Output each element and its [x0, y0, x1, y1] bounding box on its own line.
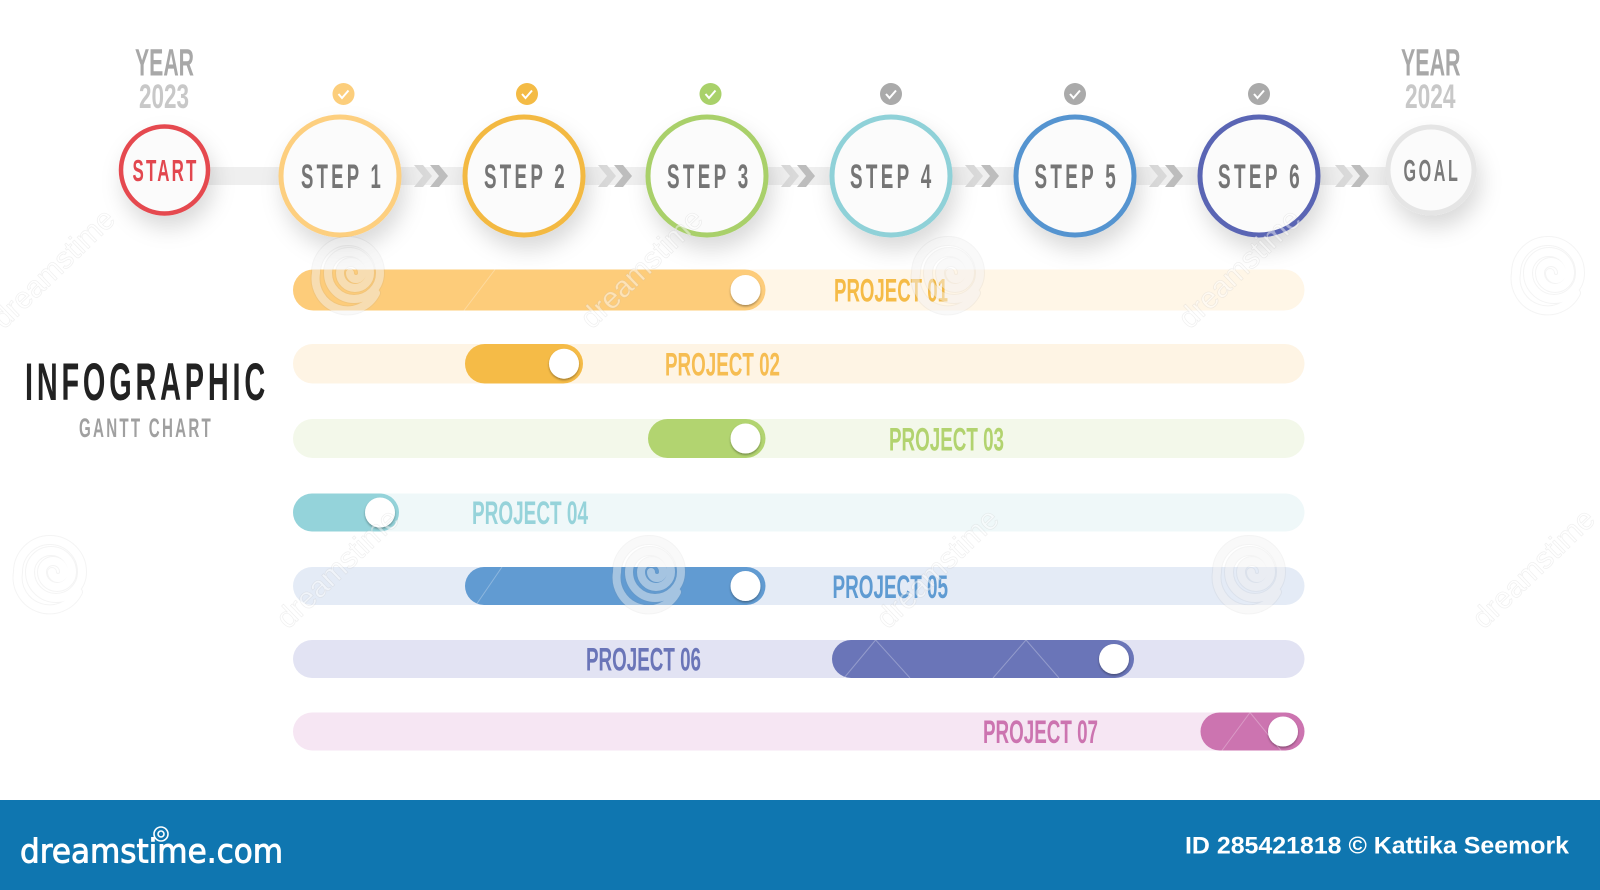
year 2024 label: YEAR [1401, 42, 1460, 84]
step 1 [281, 117, 399, 235]
project 01 row: PROJECT 01 [834, 272, 948, 308]
project 07 row: PROJECT 07 [983, 714, 1098, 750]
watermark text: dreamstime [1172, 202, 1308, 335]
project 06 row: PROJECT 06 [586, 642, 701, 678]
project 01 row [293, 270, 1304, 310]
project 02 row [293, 344, 1304, 384]
step 6: STEP 6 [1218, 158, 1303, 196]
start node [121, 126, 208, 214]
icon: check step 5 [1064, 83, 1086, 105]
project 07 row [293, 712, 1304, 750]
icon: check step 3 [700, 83, 722, 105]
icon: check step 2 [516, 83, 538, 105]
project 02 row: PROJECT 02 [665, 346, 780, 382]
step 1: STEP 1 [301, 158, 384, 196]
connector band [205, 167, 1395, 185]
project 04 row: PROJECT 04 [472, 495, 588, 531]
project 03 row [293, 419, 1304, 458]
chevrons between steps [414, 165, 1369, 187]
project 05 row: PROJECT 05 [832, 569, 948, 605]
watermark text: dreamstime [574, 202, 710, 335]
step 3: STEP 3 [667, 158, 752, 196]
footer logo: dreamstime.com [20, 832, 283, 870]
step 6 [1200, 117, 1318, 235]
title: INFOGRAPHIC [25, 353, 269, 412]
step 2 [465, 117, 583, 235]
watermark text [0, 202, 1600, 635]
footer bar [0, 800, 1600, 890]
watermark text: dreamstime [870, 502, 1006, 635]
year 2023 label [135, 42, 194, 116]
start node: START [132, 153, 198, 188]
step 2: STEP 2 [484, 158, 568, 196]
year 2023 label: YEAR [135, 42, 194, 84]
footer credit: ID 285421818 © Kattika Seemork [1185, 832, 1569, 860]
icon: check step 1 [332, 83, 354, 105]
year 2024 label [1401, 42, 1460, 116]
watermark facet lines [464, 270, 1281, 750]
title [25, 353, 269, 443]
goal node [1388, 127, 1474, 213]
year 2023 label: 2023 [139, 78, 189, 116]
icon: check step 6 [1248, 83, 1270, 105]
step 4 [832, 117, 950, 235]
watermark text: dreamstime [1466, 502, 1600, 635]
project 03 row: PROJECT 03 [889, 422, 1004, 458]
project 04 row [293, 494, 1304, 532]
icon: check step 4 [880, 83, 902, 105]
watermark spirals [18, 241, 1580, 609]
year 2024 label: 2024 [1405, 78, 1456, 116]
step 5: STEP 5 [1034, 158, 1119, 196]
title: GANTT CHART [79, 413, 213, 443]
step 3 [648, 117, 766, 235]
step 5 [1016, 117, 1134, 235]
step 4: STEP 4 [850, 158, 934, 196]
project 05 row [293, 567, 1304, 605]
goal node: GOAL [1404, 153, 1460, 188]
project 06 row [293, 640, 1304, 678]
watermark text: dreamstime [270, 502, 406, 635]
